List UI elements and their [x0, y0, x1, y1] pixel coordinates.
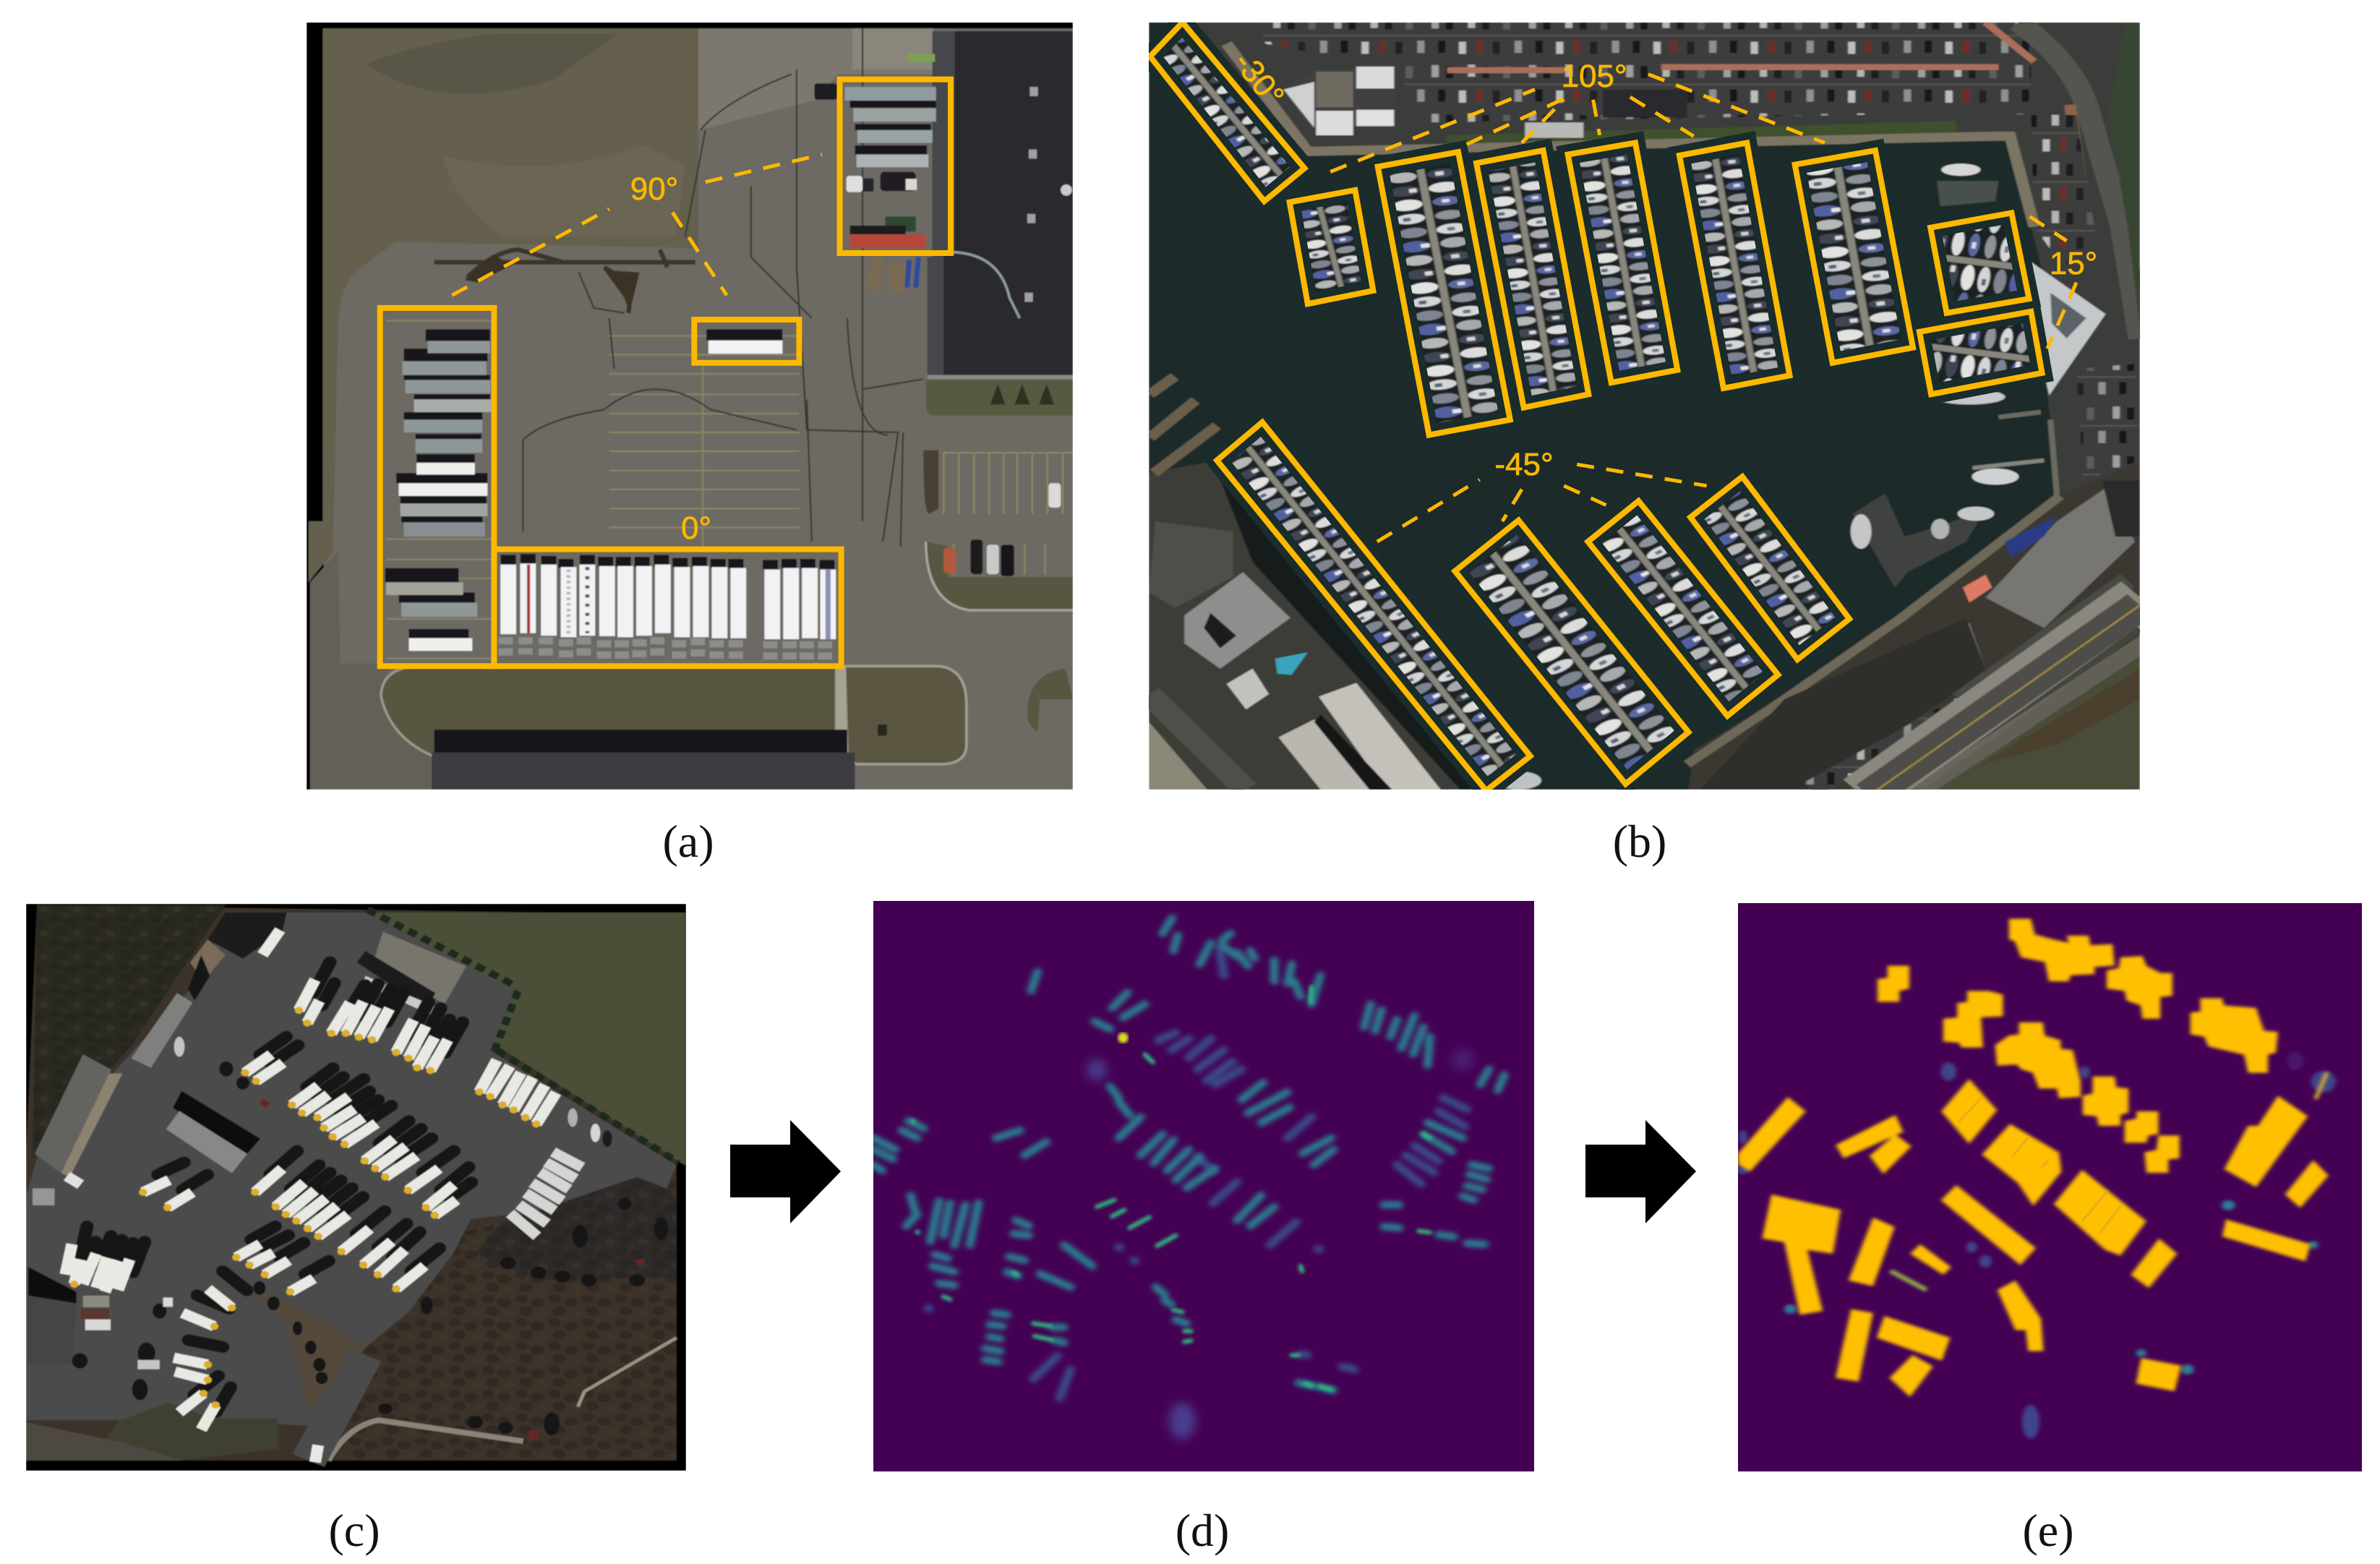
- orientation boxes b: [1150, 22, 2042, 790]
- dim density strokes: [928, 946, 1467, 1398]
- peak density point: [1118, 1033, 1129, 1043]
- caption e: (e): [2022, 1505, 2074, 1556]
- label: 15 degrees: 15°: [2050, 246, 2097, 281]
- panel a: parking lot aerial with trucks: [307, 22, 1073, 790]
- label: -45 degrees: -45°: [1494, 447, 1554, 482]
- label: 0 degrees: 0°: [681, 510, 711, 546]
- trucks left group: [385, 329, 492, 651]
- label: -30 degrees: -30°: [1227, 46, 1291, 114]
- panel b: marina aerial with boats: [1149, 22, 2140, 790]
- orientation boxes a: [380, 80, 951, 666]
- dashed connectors b: [1330, 74, 2076, 542]
- dashed connectors a: [452, 155, 822, 295]
- bus shadows: [80, 962, 471, 1412]
- water margin inside boxes: [1150, 22, 2042, 790]
- aerial photo b: [1149, 22, 2140, 795]
- mask regions: [1738, 919, 2329, 1397]
- panel e: thresholded mask map: [1738, 903, 2362, 1471]
- caption d: (d): [1176, 1505, 1229, 1556]
- caption b: (b): [1613, 816, 1666, 867]
- faint residual spots: [1737, 1051, 2336, 1439]
- arrow d to e: [1585, 1120, 1696, 1223]
- low density blobs: [1087, 1048, 1474, 1440]
- aerial photo c: [26, 904, 686, 1471]
- medium density strokes: [873, 918, 1504, 1390]
- trucks zero degree row: [506, 554, 828, 661]
- label: 105 degrees: 105°: [1561, 59, 1627, 94]
- panel d: density heat map: [873, 901, 1534, 1471]
- seam lines between merged regions: [1959, 1097, 2120, 1233]
- school buses: [66, 930, 582, 1462]
- aerial photo a: [307, 22, 1073, 790]
- label: 90 degrees: 90°: [630, 171, 678, 207]
- panel c: school bus depot aerial: [26, 904, 686, 1471]
- arrow c to d: [730, 1120, 841, 1223]
- heat map background: [873, 901, 1534, 1471]
- truck single: [706, 329, 782, 354]
- caption a: (a): [662, 816, 714, 867]
- trucks top right: [814, 54, 936, 293]
- yellow bus fronts: [74, 1010, 536, 1405]
- caption c: (c): [328, 1505, 380, 1556]
- boat docks inside boxes: [1150, 22, 2042, 790]
- mask background: [1738, 903, 2362, 1471]
- bright density strokes: [913, 987, 1430, 1390]
